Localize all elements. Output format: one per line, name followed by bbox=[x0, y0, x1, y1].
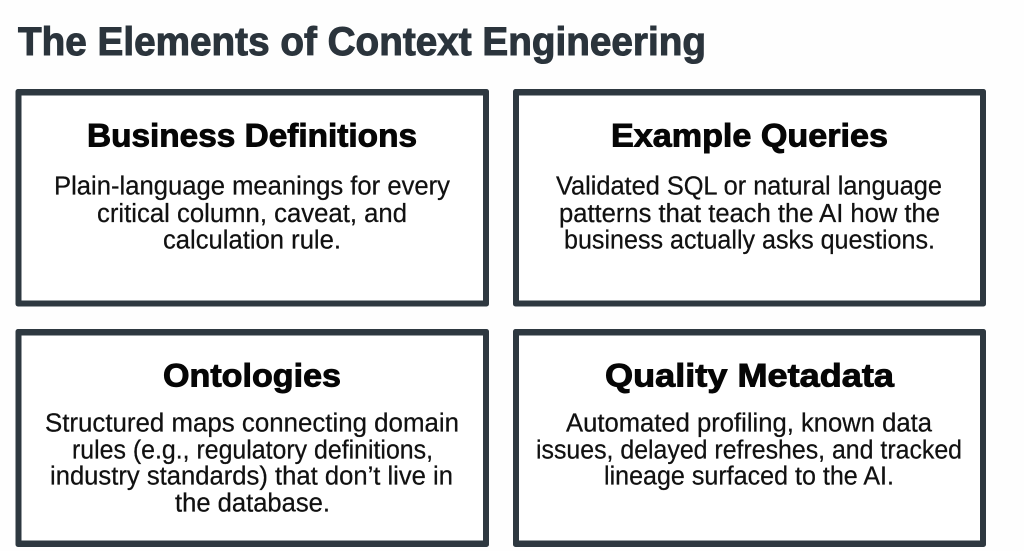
title: The Elements of Context Engineering bbox=[18, 20, 706, 64]
text: ontologies description bbox=[45, 410, 459, 518]
text: business definitions description: critical column, caveat, and bbox=[97, 200, 407, 228]
text: quality metadata description: lineage surfaced to the AI. bbox=[604, 462, 894, 490]
heading: business definitions: Business Definitions bbox=[87, 118, 417, 154]
heading: ontologies: Ontologies bbox=[163, 358, 341, 394]
text: ontologies description: the database. bbox=[175, 490, 330, 518]
text: quality metadata description bbox=[536, 410, 962, 490]
text: quality metadata description: issues, delayed refreshes, and tracked bbox=[536, 436, 962, 464]
heading: example queries: Example Queries bbox=[611, 118, 888, 154]
text: ontologies description: industry standards) that don’t live in bbox=[50, 462, 453, 490]
text: business definitions description bbox=[54, 172, 450, 254]
text: example queries description: business actually asks questions. bbox=[564, 226, 935, 254]
heading: quality metadata: Quality Metadata bbox=[605, 358, 894, 394]
text: ontologies description: rules (e.g., regulatory definitions, bbox=[72, 436, 433, 464]
text: quality metadata description: Automated profiling, known data bbox=[566, 410, 933, 438]
text: business definitions description: Plain-language meanings for every bbox=[54, 172, 450, 200]
text: example queries description: patterns that teach the AI how the bbox=[559, 200, 940, 228]
panel: ontologies bbox=[16, 329, 489, 547]
panel: business definitions bbox=[16, 89, 489, 306]
panel: quality metadata bbox=[513, 329, 986, 547]
panel: example queries bbox=[513, 89, 986, 306]
text: ontologies description: Structured maps connecting domain bbox=[45, 410, 459, 438]
text: example queries description bbox=[556, 172, 942, 254]
text: example queries description: Validated SQL or natural language bbox=[556, 172, 942, 200]
text: business definitions description: calculation rule. bbox=[163, 226, 341, 254]
